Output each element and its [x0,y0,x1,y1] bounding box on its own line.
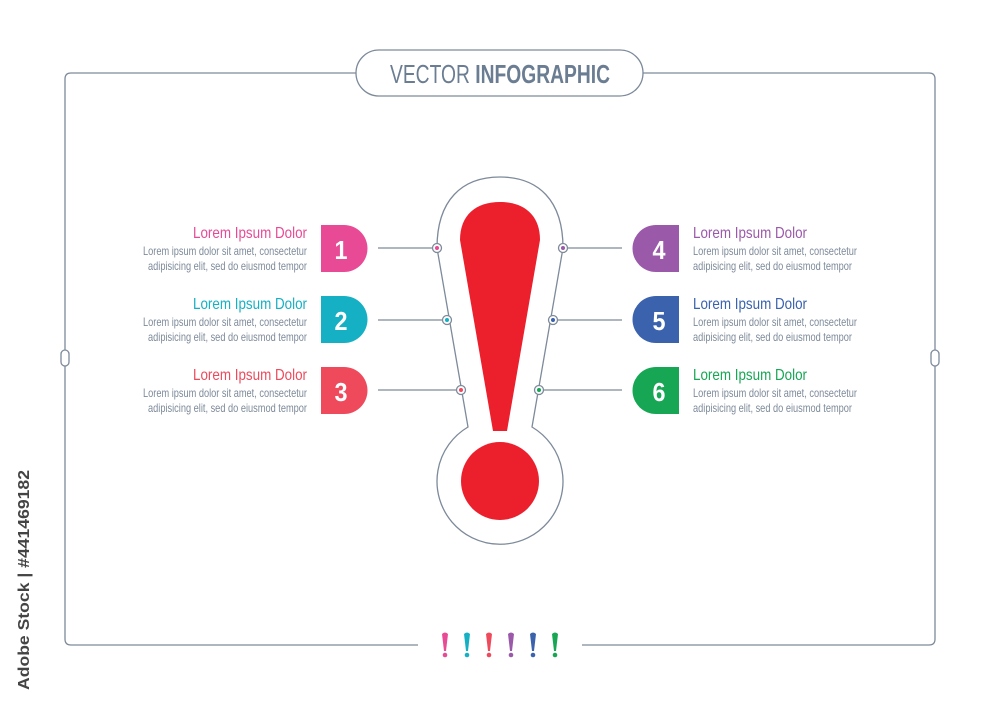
item 2 [143,296,367,344]
item 3 [143,367,367,415]
item 4: Lorem ipsum dolor sit amet, consectetur [693,244,857,258]
item 3: adipisicing elit, sed do eiusmod tempor [148,401,307,415]
title [356,50,643,96]
item 2: Lorem ipsum dolor sit amet, consectetur [143,315,307,329]
item 1: Lorem ipsum dolor sit amet, consectetur [143,244,307,258]
icon: right clip [931,350,939,366]
item 4 [632,225,857,273]
item 5 [632,296,857,344]
title: VECTOR INFOGRAPHIC [390,59,610,89]
item 5: Lorem ipsum dolor sit amet, consectetur [693,315,857,329]
item 1: 1 [334,235,348,265]
item 3: Lorem Ipsum Dolor [193,367,308,384]
item 2: adipisicing elit, sed do eiusmod tempor [148,330,307,344]
item 3: 3 [334,377,348,407]
item 1 [143,225,367,273]
item 6: Lorem Ipsum Dolor [693,367,808,384]
item 1: adipisicing elit, sed do eiusmod tempor [148,259,307,273]
icon: left clip [61,350,69,366]
bottom exclamation icons [442,632,558,657]
item 3: Lorem ipsum dolor sit amet, consectetur [143,386,307,400]
item 6: 6 [652,377,666,407]
item 6 [632,367,857,415]
watermark id text: Adobe Stock | #441469182 [16,470,33,690]
item 4: adipisicing elit, sed do eiusmod tempor [693,259,852,273]
item 4: Lorem Ipsum Dolor [693,225,808,242]
exclamation mark [437,177,563,544]
item 5: adipisicing elit, sed do eiusmod tempor [693,330,852,344]
item 1: Lorem Ipsum Dolor [193,225,308,242]
item 4: 4 [652,235,666,265]
item 6: Lorem ipsum dolor sit amet, consectetur [693,386,857,400]
item 5: Lorem Ipsum Dolor [693,296,808,313]
connectors [378,244,622,394]
frame [65,73,935,645]
item 2: 2 [334,306,348,336]
item 2: Lorem Ipsum Dolor [193,296,308,313]
item 5: 5 [652,306,666,336]
item 6: adipisicing elit, sed do eiusmod tempor [693,401,852,415]
